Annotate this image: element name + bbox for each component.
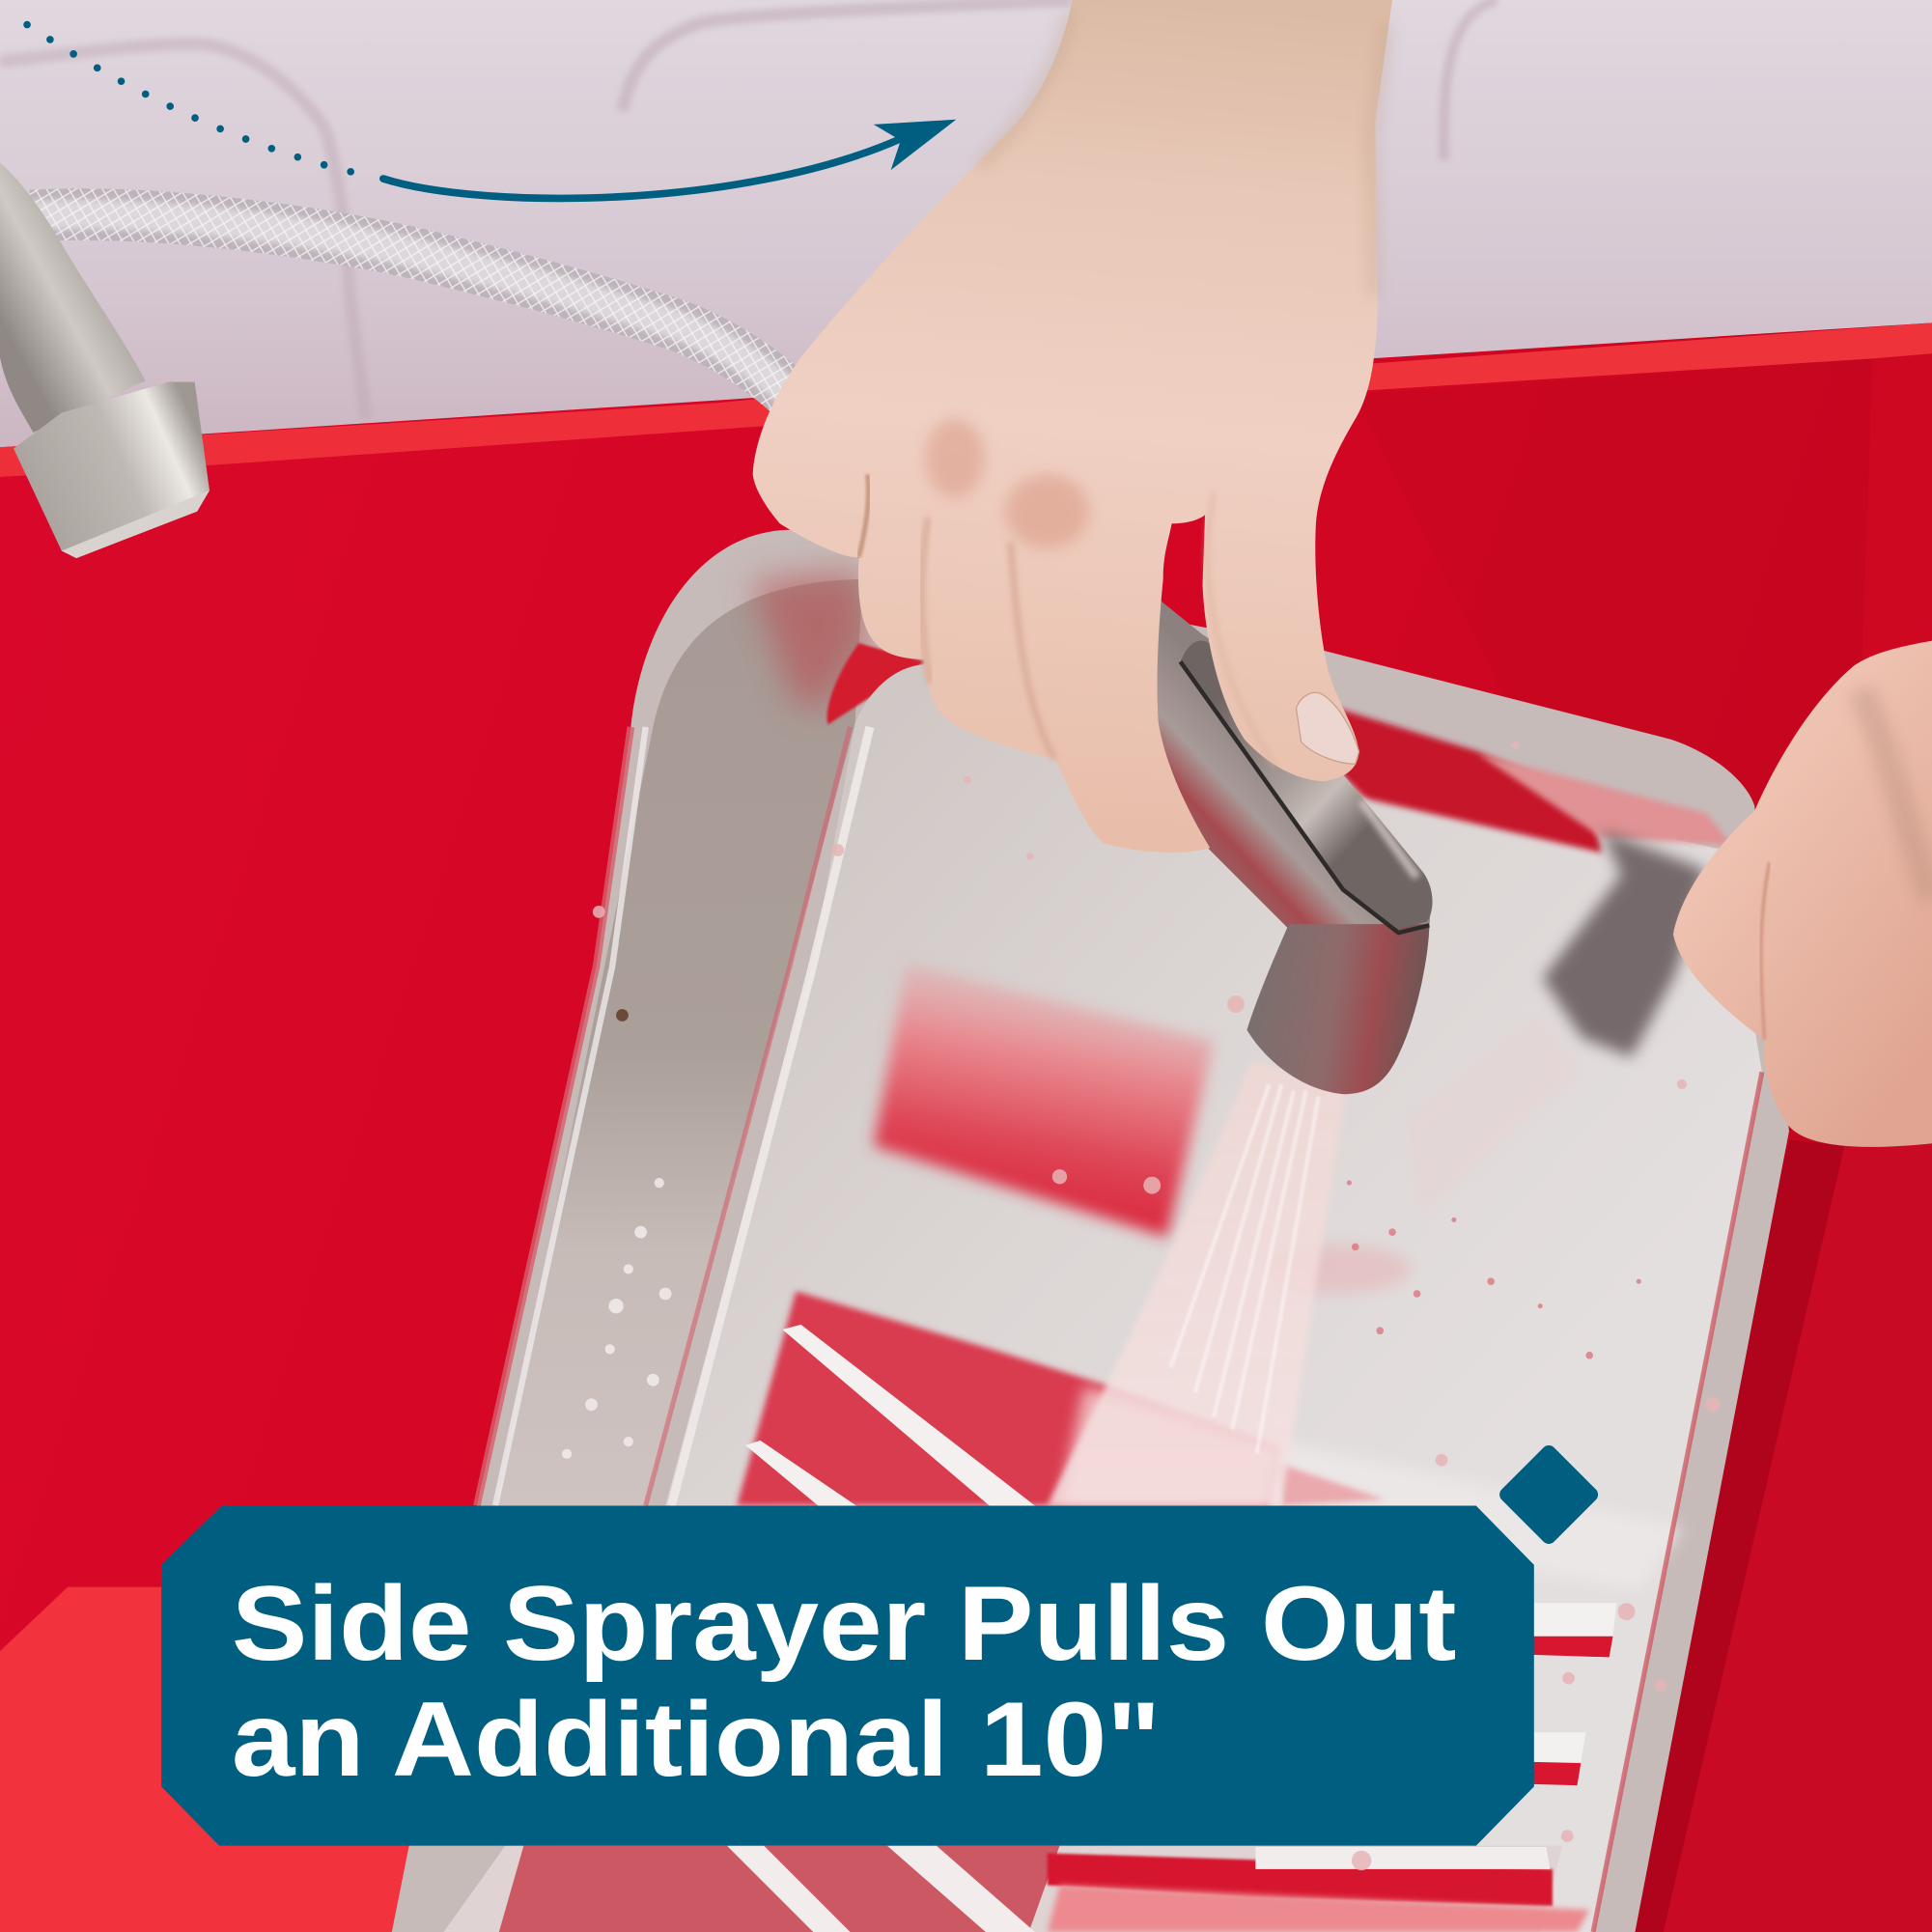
right rim red line (1593, 1072, 1762, 1932)
tray inner floor (532, 664, 1762, 1932)
wall background (0, 0, 1932, 492)
knuckle shading (858, 474, 869, 557)
tray red reflection centre (874, 964, 1214, 1237)
wrist hair edges (980, 13, 1387, 295)
tray bottom strip (443, 1846, 1562, 1932)
right hand holding tray (1673, 641, 1932, 1147)
banner panel (161, 1505, 1534, 1846)
thumb nail (1297, 692, 1359, 764)
hand and forearm (753, 0, 1392, 853)
arrow: sprayer pull-out direction (27, 25, 956, 198)
inner rim lines (646, 727, 851, 1505)
icon: diamond accent (1497, 1442, 1601, 1547)
pale floor bands (1281, 1442, 1682, 1589)
water droplets (562, 742, 1721, 1870)
caption banner (161, 1442, 1601, 1846)
sink basin lower ledge (0, 1587, 518, 1932)
tray left wall, speckled grey (495, 579, 862, 1505)
stain on tray wall (616, 1009, 629, 1022)
heading text (232, 1565, 1456, 1799)
dark strip beside the tray (1602, 1139, 1844, 1932)
tray white ribs (782, 1325, 1035, 1505)
heading text: Side Sprayer Pulls Out (232, 1565, 1456, 1683)
faucet spout (0, 162, 210, 558)
tray red ribbed section (737, 1291, 1281, 1505)
sprayer upper lever (1181, 640, 1433, 930)
tray right ribs (1533, 1603, 1616, 1637)
side sprayer hose (31, 214, 800, 405)
left hand gripping sprayer (753, 0, 1433, 1094)
tray upper-left red reflection (751, 570, 869, 709)
water spray (1048, 1013, 1582, 1505)
tray red reflection, top right (1326, 705, 1602, 853)
paint tray (392, 530, 1789, 1932)
tray outer rim (392, 530, 1789, 1932)
heading text: an Additional 10" (232, 1681, 1161, 1799)
shadow of hand on tray (1543, 830, 1705, 1057)
sprayer body (1156, 599, 1432, 929)
sprayer head (1246, 924, 1429, 1094)
knuckle hair (1861, 690, 1932, 900)
